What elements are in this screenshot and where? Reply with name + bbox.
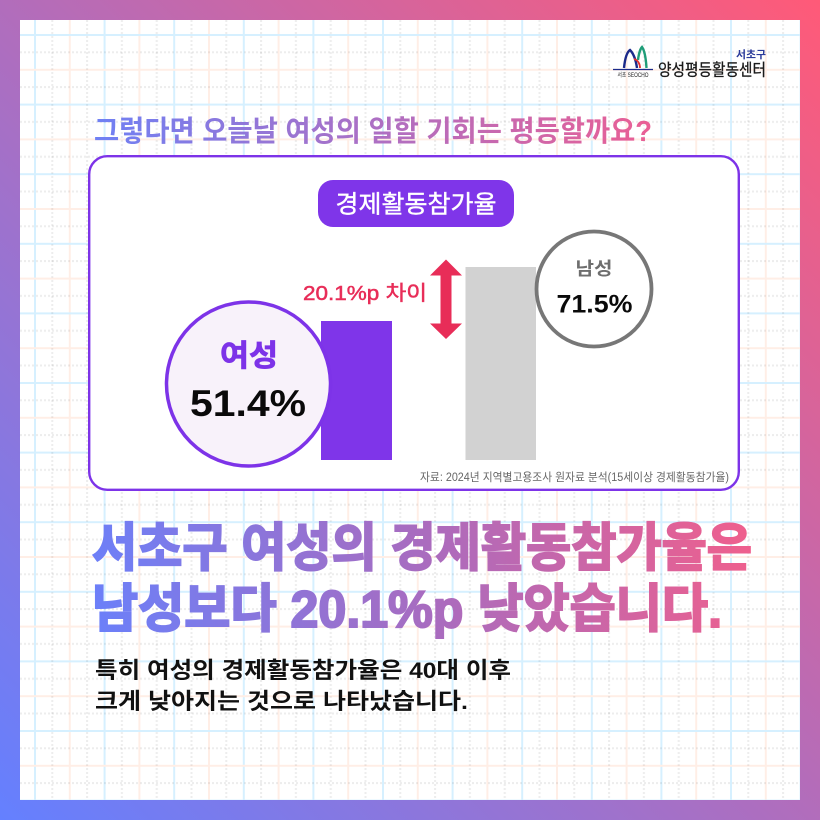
chart title pill: 경제활동참가율	[336, 190, 496, 218]
main heading	[92, 520, 752, 639]
logo: Seocho-gu gender equality center	[613, 47, 766, 80]
bar: male	[466, 267, 536, 460]
heading line 2: 남성보다 20.1%p 낮았습니다.	[92, 581, 722, 639]
logo caption: 서초 SEOCHO	[618, 71, 649, 79]
bar: female	[321, 321, 392, 460]
body text	[95, 658, 511, 714]
icon: Seocho mark	[613, 47, 653, 70]
body line 1: 특히 여성의 경제활동참가율은 40대 이후	[95, 658, 511, 683]
chart title pill	[318, 180, 514, 227]
callout: male: 71.5%	[556, 290, 632, 318]
callout: female: 51.4%	[190, 383, 306, 424]
callout: female: 여성	[220, 340, 278, 373]
callout: male	[536, 232, 652, 346]
body line 2: 크게 낮아지는 것으로 나타났습니다.	[95, 689, 468, 714]
panel: chart card	[89, 156, 739, 490]
source note: 자료: 2024년 지역별고용조사 원자료 분석(15세이상 경제활동참가율)	[420, 470, 729, 484]
callout: male: 남성	[576, 259, 612, 279]
callout: female	[166, 302, 330, 466]
logo district name: 서초구	[736, 48, 766, 61]
icon: double arrow	[430, 260, 462, 339]
difference label: 20.1%p 차이	[303, 282, 427, 305]
question subheading: 그렇다면 오늘날 여성의 일할 기회는 평등할까요?	[94, 115, 652, 148]
logo center name: 양성평등활동센터	[658, 60, 766, 80]
heading line 1: 서초구 여성의 경제활동참가율은	[92, 520, 752, 578]
